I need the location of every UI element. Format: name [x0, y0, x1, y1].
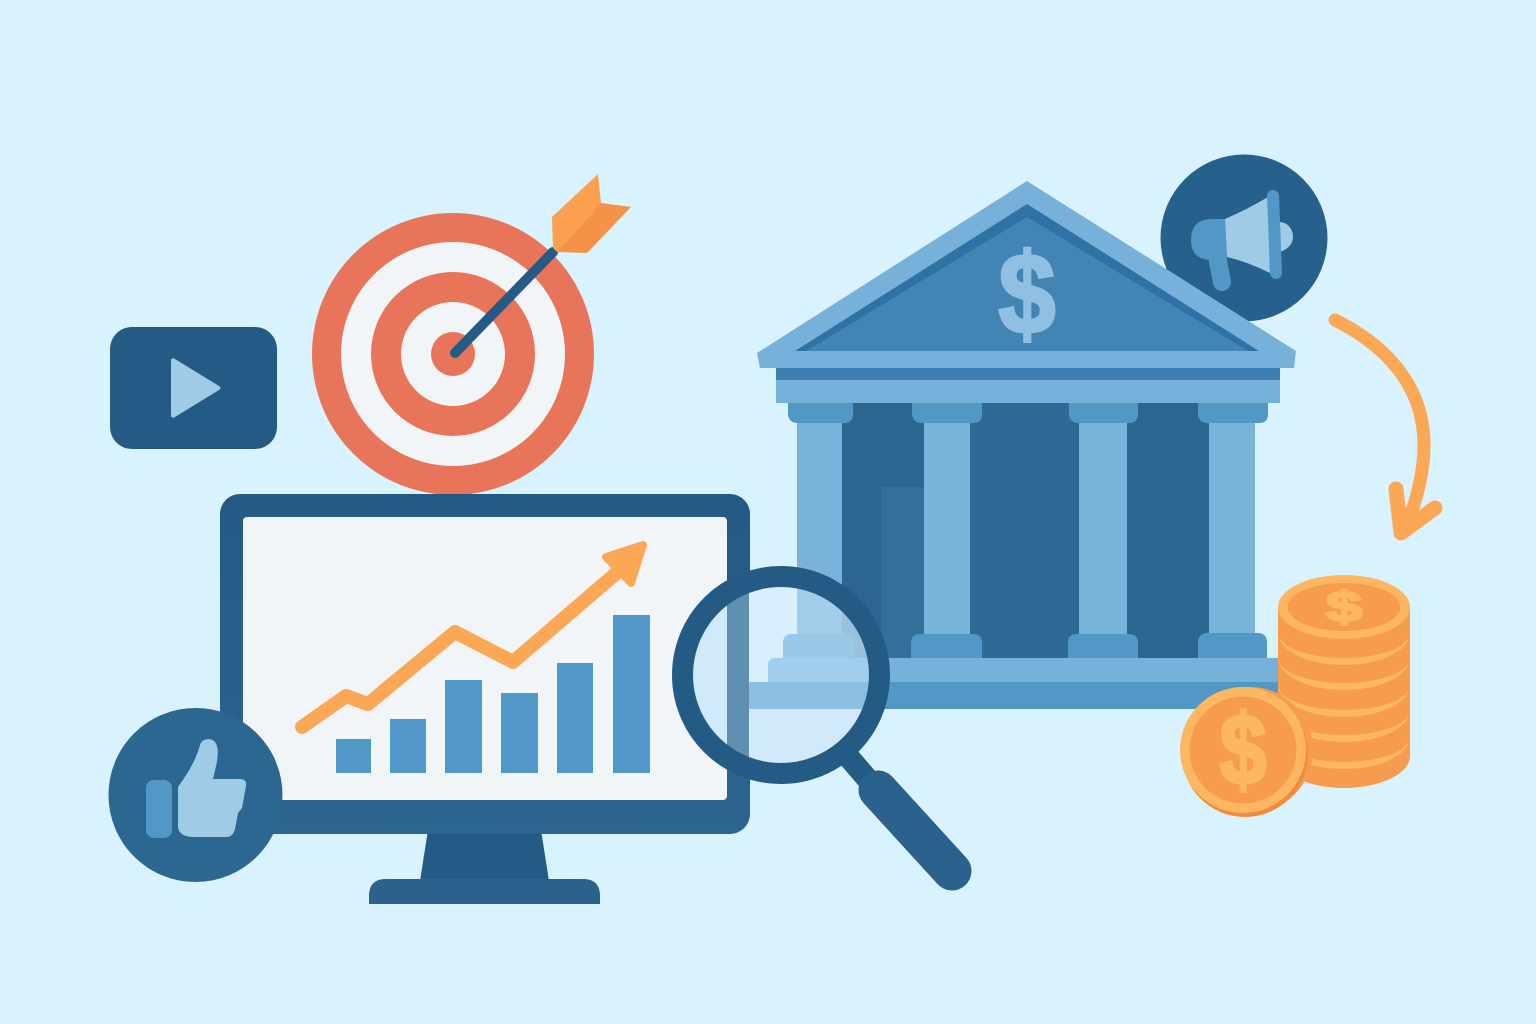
trend arrow — [302, 545, 643, 727]
curved arrow — [1335, 320, 1435, 533]
dollar sign on roof: $ — [998, 230, 1056, 357]
column capitals — [788, 403, 1268, 423]
dart fletching — [552, 174, 631, 253]
building: bank — [749, 181, 1296, 709]
column bases — [783, 633, 1267, 658]
columns — [797, 420, 1255, 636]
icon: video play button — [110, 327, 277, 449]
stack rim lines — [1278, 633, 1410, 769]
bar chart — [336, 615, 650, 773]
entablature — [776, 367, 1280, 403]
magnifier ring — [682, 576, 880, 774]
target rings — [312, 213, 594, 495]
monitor stand — [369, 830, 600, 904]
icon: thumbs up badge — [108, 708, 282, 882]
monitor — [220, 494, 750, 904]
icon: coin stack — [1278, 575, 1410, 788]
magnifier handle — [846, 754, 952, 871]
icon: front coin — [1180, 687, 1313, 817]
icon: target with arrow — [312, 174, 631, 495]
top coin — [1278, 575, 1410, 639]
dart shaft — [455, 252, 553, 353]
magnifying glass — [680, 570, 952, 871]
top coin dollar: $ — [1326, 582, 1362, 631]
lens view — [693, 588, 869, 763]
illustration: bank marketing scene — [108, 154, 1442, 904]
roof — [757, 181, 1296, 368]
building interior — [830, 403, 1220, 659]
icon: front coin: $ — [1219, 693, 1267, 806]
monitor screen — [243, 517, 727, 800]
steps — [749, 658, 1282, 709]
icon: megaphone badge — [1160, 154, 1328, 322]
monitor frame — [220, 494, 750, 834]
stack body — [1278, 607, 1410, 788]
